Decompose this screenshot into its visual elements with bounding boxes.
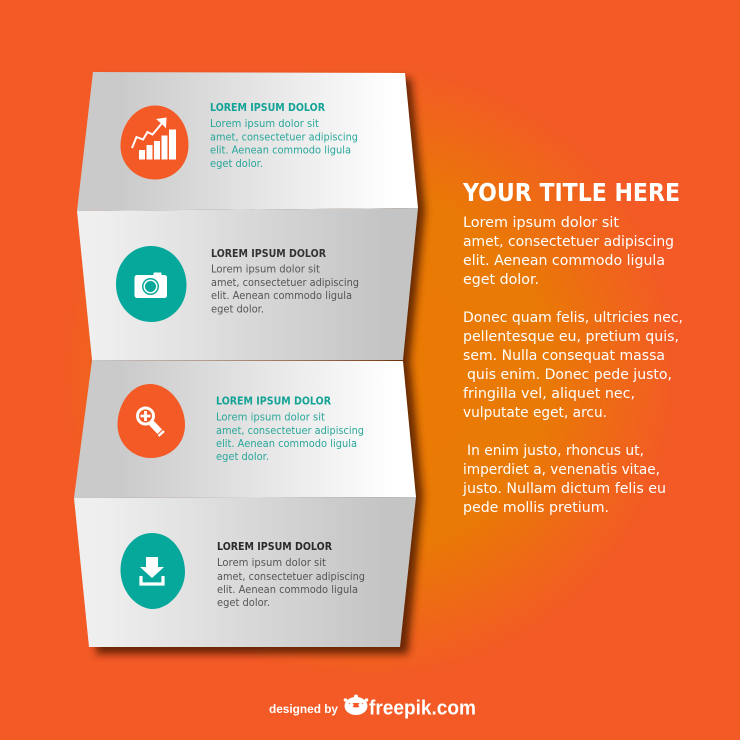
body text	[211, 264, 359, 316]
right text block: justo. Nullam dictum felis eu	[462, 481, 666, 497]
body text	[216, 412, 364, 463]
right text block: sem. Nulla consequat massa	[463, 348, 665, 364]
icon: freepik mascot	[344, 694, 368, 715]
body text: elit. Aenean commodo ligula	[211, 290, 352, 302]
body text	[210, 118, 358, 170]
body text: Lorem ipsum dolor sit	[217, 557, 326, 569]
right text block: quis enim. Donec pede justo,	[467, 367, 672, 383]
icon: magnifier	[118, 384, 185, 458]
right text block: Lorem ipsum dolor sit	[463, 215, 619, 231]
folded panel shadow	[96, 78, 425, 654]
body text: amet, consectetuer adipiscing	[210, 132, 358, 144]
body text: eget dolor.	[210, 158, 263, 170]
freepik footer logo	[269, 694, 476, 720]
right text block: vulputate eget, arcu.	[463, 405, 607, 421]
icon: download	[120, 533, 185, 609]
right text block: amet, consectetuer adipiscing	[463, 234, 674, 250]
panel 4: download	[74, 497, 416, 647]
panel 1: growth	[77, 72, 418, 211]
right text block: pede mollis pretium.	[463, 500, 609, 516]
panel 3: search	[74, 360, 416, 498]
heading: LOREM IPSUM DOLOR	[210, 102, 325, 114]
heading: LOREM IPSUM DOLOR	[216, 396, 331, 408]
body text: eget dolor.	[216, 451, 269, 463]
title: YOUR TITLE HERE	[462, 178, 680, 207]
body text: elit. Aenean commodo ligula	[217, 584, 358, 596]
heading: LOREM IPSUM DOLOR	[211, 248, 326, 260]
right text block: fringilla vel, aliquet nec,	[463, 386, 635, 402]
body text: Lorem ipsum dolor sit	[210, 118, 319, 130]
body text: Lorem ipsum dolor sit	[216, 412, 325, 424]
body text: amet, consectetuer adipiscing	[217, 571, 365, 583]
freepik footer logo: designed by	[269, 702, 338, 716]
body text: amet, consectetuer adipiscing	[211, 277, 359, 289]
right text block: eget dolor.	[463, 272, 539, 288]
right text block: imperdiet a, venenatis vitae,	[463, 462, 660, 478]
right text block: pellentesque eu, pretium quis,	[463, 329, 679, 345]
freepik footer logo: freepik.com	[369, 698, 476, 720]
icon: camera	[116, 246, 186, 322]
panel 2: camera	[77, 208, 418, 360]
body text: Lorem ipsum dolor sit	[211, 264, 320, 276]
right text block	[462, 215, 683, 516]
body text	[217, 557, 365, 609]
heading: LOREM IPSUM DOLOR	[217, 541, 332, 553]
body text: amet, consectetuer adipiscing	[216, 425, 364, 437]
body text: eget dolor.	[211, 304, 264, 316]
icon: growth chart	[120, 106, 188, 180]
folded brochure	[74, 72, 418, 647]
right text block: Donec quam felis, ultricies nec,	[463, 310, 683, 326]
right text block: In enim justo, rhoncus ut,	[467, 443, 644, 459]
body text: elit. Aenean commodo ligula	[216, 438, 357, 450]
body text: eget dolor.	[217, 597, 270, 609]
right text block: elit. Aenean commodo ligula	[463, 253, 665, 269]
body text: elit. Aenean commodo ligula	[210, 144, 351, 156]
